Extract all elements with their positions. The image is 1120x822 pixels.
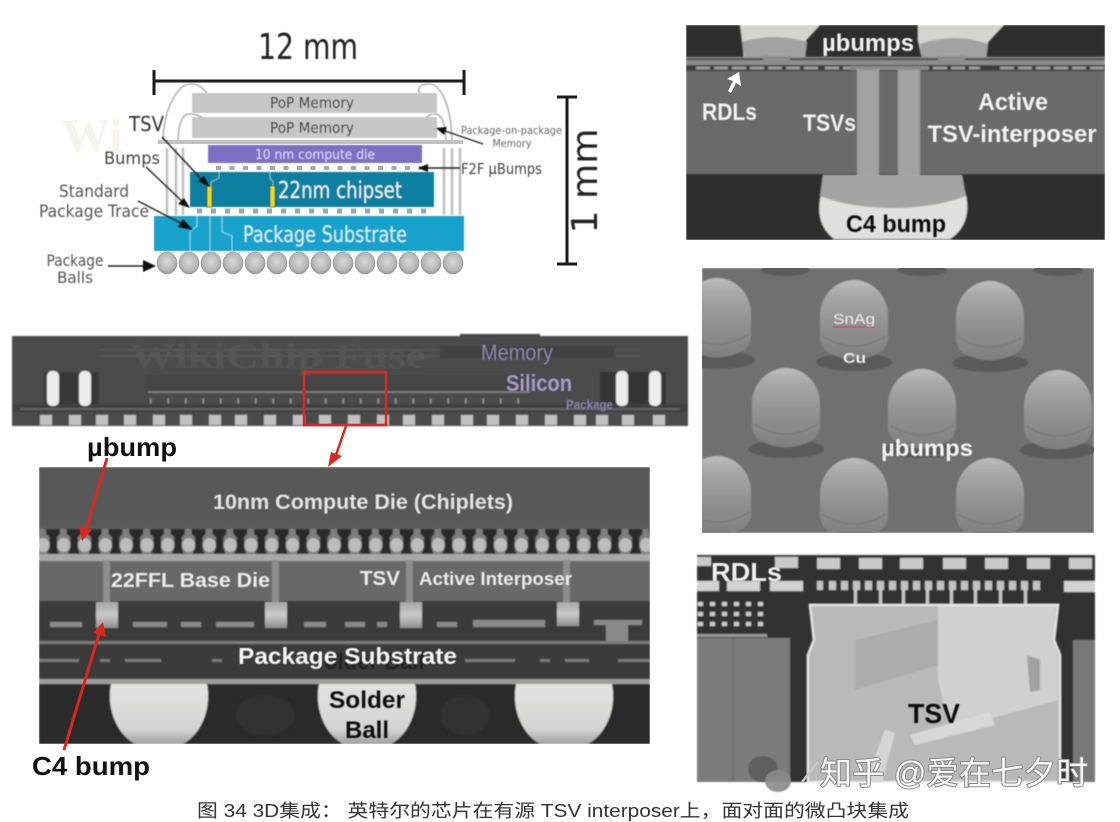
panel: magnified cross-section: Solder Ball (310, 649, 424, 674)
watermark: Zhihu: 知乎 @爱在七夕时 (820, 755, 1088, 791)
10 nm compute die: 10 nm compute die (255, 148, 375, 163)
panel: package cross-section diagram (39, 27, 606, 287)
layer labels: TSV (360, 568, 401, 590)
C4 bump (819, 195, 967, 239)
RDL top row (697, 557, 1092, 569)
22nm chipset: 22nm chipset (278, 178, 402, 204)
C4 bump row (197, 208, 426, 214)
dimension: 1 mm: 1 mm (565, 129, 606, 233)
panel: micro bump SEM photo (679, 264, 1096, 538)
interposer silicon (686, 71, 1105, 174)
labels: µbumps (881, 435, 973, 461)
callout labels and arrows: Memory (492, 137, 532, 150)
labels: Cu (843, 350, 866, 367)
callout labels and arrows (39, 112, 562, 287)
package balls (157, 252, 463, 274)
labels (711, 557, 960, 729)
callout labels and arrows: Standard (59, 182, 129, 202)
layer labels: Package (566, 397, 613, 412)
labels: TSV (908, 698, 960, 729)
dimension: 1 mm (557, 97, 606, 264)
label: C4 bump with arrow: C4 bump (32, 751, 150, 781)
dimension: 12 mm (154, 27, 464, 95)
10 nm compute die (208, 145, 422, 163)
labels (702, 30, 1096, 238)
micro bump layer (39, 525, 650, 561)
label: C4 bump with arrow (32, 622, 150, 781)
PoP memory bottom: PoP Memory (270, 119, 354, 137)
PoP memory top (192, 93, 437, 113)
RDL lines (686, 57, 1105, 58)
callout labels and arrows: Package Trace (39, 202, 149, 222)
red zoom box and arrow (304, 372, 386, 467)
labels: µbumps (822, 30, 914, 57)
package substrate (154, 216, 464, 251)
labels: SnAg (833, 311, 875, 328)
layer labels: Silicon (506, 370, 572, 396)
panel: magnified cross-section (32, 432, 650, 781)
micro bumps (740, 25, 820, 58)
WikiChip Fuse watermark: WikiChip Fuse (130, 336, 426, 376)
callout labels and arrows: Package (46, 251, 104, 270)
panel: large TSV cross-section (697, 555, 1095, 782)
layer labels: Solder (329, 687, 405, 714)
callout labels and arrows: Package-on-package (461, 124, 562, 137)
RDL second row (697, 581, 1095, 592)
callout labels and arrows: Bumps (104, 149, 160, 169)
caption: 图 34 3D集成： 英特尔的芯片在有源 TSV interposer上，面对面的微凸块集成 (197, 801, 909, 821)
layer labels: Ball (345, 717, 389, 744)
dense via dots (698, 604, 765, 624)
compute die layer (39, 467, 650, 525)
label: microbump with arrow: µbump (87, 432, 177, 462)
labels: RDLs (702, 99, 757, 126)
shadows (679, 351, 1096, 459)
TSV pillars (103, 560, 570, 602)
layer labels: 22FFL Base Die (111, 570, 270, 592)
solder balls (110, 684, 208, 744)
base die layer (39, 561, 650, 601)
package-on-package substrate line (158, 140, 463, 144)
F2F micro bumps (216, 166, 421, 170)
left and right silicon (697, 638, 790, 782)
labels: C4 bump (846, 211, 946, 238)
PoP memory top: PoP Memory (270, 94, 354, 112)
top row stubs (760, 268, 810, 276)
labels: Active (978, 89, 1048, 116)
panel: TSV interposer cross-section (686, 25, 1105, 240)
faint WikiChip watermark: Wi (62, 110, 122, 163)
arrow: RDLs pointer (727, 72, 741, 93)
labels: RDLs (711, 557, 782, 587)
labels: TSV-interposer (928, 121, 1096, 148)
dimension: 12 mm: 12 mm (258, 27, 358, 68)
layer labels (481, 340, 613, 412)
panel: package SEM cross-section (12, 334, 688, 467)
wire bonds (163, 84, 460, 215)
substrate traces (50, 620, 642, 641)
layer labels: Package Substrate (238, 643, 457, 669)
callout labels and arrows: F2F µBumps (461, 160, 542, 178)
callout labels and arrows: TSV (128, 112, 164, 136)
layer labels: 10nm Compute Die (Chiplets) (213, 491, 513, 514)
22nm chipset (190, 172, 434, 207)
labels: TSVs (803, 110, 856, 137)
icon: WeChat bubbles (748, 756, 791, 792)
layer labels: Memory (481, 340, 553, 365)
TSV copper (808, 605, 1060, 782)
labels (833, 311, 973, 461)
TSVs (857, 68, 879, 178)
PoP memory bottom (192, 117, 437, 138)
label: microbump with arrow (79, 432, 177, 541)
C4 bumps (96, 602, 579, 628)
layer labels: Active Interposer (419, 569, 572, 589)
callout labels and arrows: Balls (57, 268, 93, 287)
vias into TSV (854, 590, 1027, 606)
package substrate: Package Substrate (243, 223, 407, 248)
layer labels (111, 491, 572, 744)
